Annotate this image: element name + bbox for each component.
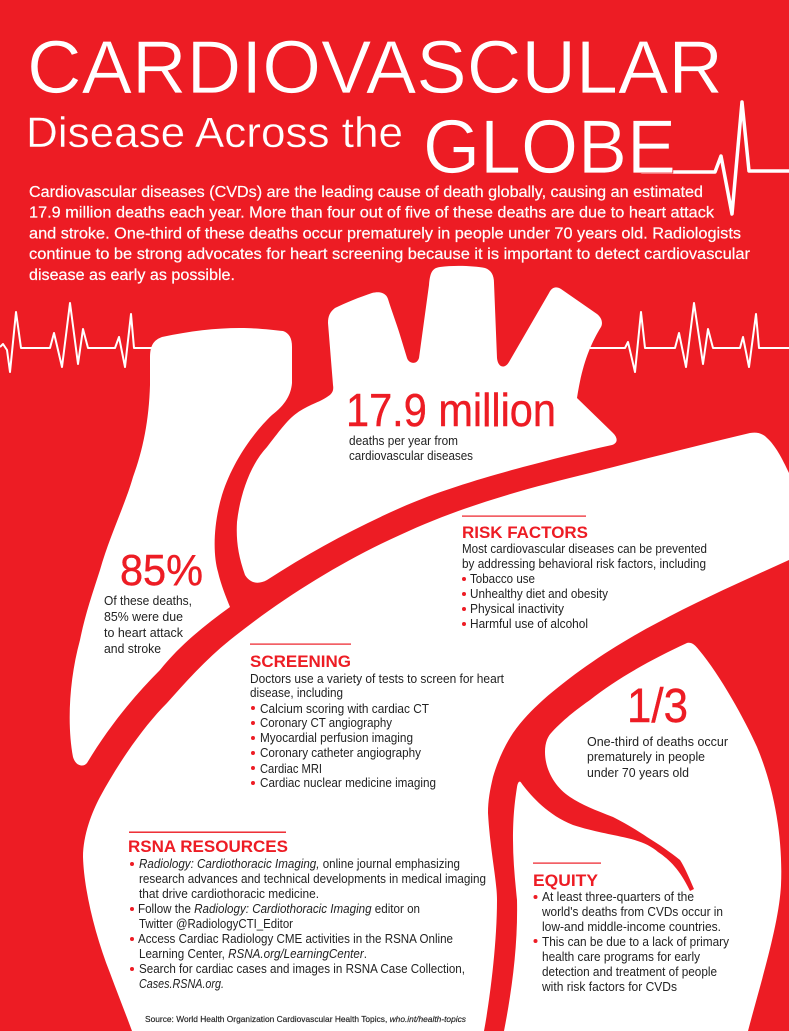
heart illustration [70, 266, 789, 1031]
heading: risk factors: RISK FACTORS [462, 523, 588, 542]
stat: 17.9 million: deaths per year from [349, 434, 458, 448]
panel: screening: Cardiac nuclear medicine imaging [260, 776, 436, 790]
panel: equity: low-and middle-income countries. [542, 920, 721, 934]
heart: aorta chamber [70, 328, 292, 765]
panel: risk factors: by addressing behavioral risk factors, including [462, 557, 706, 571]
intro paragraph: continue to be strong advocates for heart screening because it is important to detect cardiovascular [29, 246, 750, 263]
panel: screening: Coronary CT angiography [260, 716, 393, 730]
panel: equity: health care programs for early [542, 950, 701, 964]
heartbeat line: title [642, 102, 789, 214]
panel: screening: Calcium scoring with cardiac CT [260, 702, 429, 716]
stat: one third: One-third of deaths occur [587, 735, 728, 749]
panel: RSNA resources: Twitter @RadiologyCTI_Editor [139, 917, 293, 931]
stat: 85%: Of these deaths, [104, 594, 192, 608]
title [26, 25, 723, 190]
panel: RSNA resources: Follow the Radiology: Cardiothoracic Imaging editor on [138, 902, 420, 916]
stat: 17.9 million: 17.9 million [346, 384, 556, 436]
panel: risk factors: Unhealthy diet and obesity [470, 587, 609, 601]
stat: 85%: to heart attack [104, 626, 184, 640]
heart: upper chamber with vessels [237, 266, 617, 583]
panel: RSNA resources: Search for cardiac cases and images in RSNA Case Collection, [139, 962, 465, 976]
panel: risk factors [462, 516, 707, 631]
panel: RSNA resources: that drive cardiothoracic medicine. [139, 887, 319, 901]
title line: Disease Across the: Disease Across the [26, 109, 403, 157]
panel: equity: This can be due to a lack of primary [542, 935, 730, 949]
stat: 85% [104, 546, 203, 656]
panel: screening: Doctors use a variety of tests to screen for heart [250, 672, 504, 686]
panel: RSNA resources: Cases.RSNA.org. [139, 977, 224, 991]
intro paragraph: and stroke. One-third of these deaths occur prematurely in people under 70 years old. Radiologists [29, 226, 741, 242]
stat: 17.9 million [346, 384, 556, 463]
panel: risk factors: Harmful use of alcohol [470, 617, 588, 631]
panel: screening: Myocardial perfusion imaging [260, 731, 413, 745]
panel: risk factors: Most cardiovascular diseases can be prevented [462, 542, 707, 556]
panel: RSNA resources: Radiology: Cardiothoracic Imaging, online journal emphasizing [139, 857, 460, 871]
heading: screening: SCREENING [250, 652, 351, 671]
panel: risk factors: Tobacco use [470, 572, 535, 586]
panel: RSNA resources: Learning Center, RSNA.org/LearningCenter. [139, 947, 367, 961]
panel: equity: At least three-quarters of the [542, 890, 694, 904]
title line: Cardiovascular: CARDIOVASCULAR [27, 25, 723, 109]
stat: one third: under 70 years old [587, 766, 689, 780]
panel: RSNA resources: Access Cardiac Radiology CME activities in the RSNA Online [138, 932, 453, 946]
title line: Globe: GLOBE [423, 105, 676, 190]
stat: one third [587, 680, 728, 780]
heading: RSNA resources: RSNA RESOURCES [128, 837, 288, 856]
panel: screening: Cardiac MRI [260, 762, 322, 776]
heartbeat line: left [0, 303, 152, 372]
heartbeat line: right [590, 303, 789, 372]
heart: main lower body [83, 433, 789, 1031]
intro paragraph: Cardiovascular diseases (CVDs) are the leading cause of death globally, causing an estimated [29, 184, 703, 201]
panel: equity [533, 862, 730, 994]
heading: equity: EQUITY [533, 871, 599, 890]
stat: 85%: 85% [120, 546, 203, 595]
panel: screening: disease, including [250, 686, 343, 700]
heart: right chamber with branch [504, 643, 781, 1031]
stat: 85%: 85% were due [104, 610, 183, 624]
panel: RSNA resources [128, 832, 486, 991]
panel: risk factors: Physical inactivity [470, 602, 565, 616]
intro paragraph: disease as early as possible. [29, 267, 235, 284]
panel: screening [250, 644, 504, 790]
stat: 17.9 million: cardiovascular diseases [349, 449, 473, 463]
stat: one third: prematurely in people [587, 750, 705, 764]
source note: Source: World Health Organization Cardiovascular Health Topics, who.int/health-topics [145, 1014, 467, 1024]
panel: screening: Coronary catheter angiography [260, 746, 422, 760]
panel: equity: with risk factors for CVDs [541, 980, 677, 994]
stat: 85%: and stroke [104, 642, 161, 656]
intro paragraph [29, 184, 750, 284]
panel: equity: world's deaths from CVDs occur in [541, 905, 723, 919]
panel: RSNA resources: research advances and technical developments in medical imaging [139, 872, 486, 886]
stat: one third: 1/3 [627, 680, 688, 733]
panel: equity: detection and treatment of people [542, 965, 717, 979]
intro paragraph: 17.9 million deaths each year. More than four out of five of these deaths are due to heart attack [29, 204, 714, 222]
